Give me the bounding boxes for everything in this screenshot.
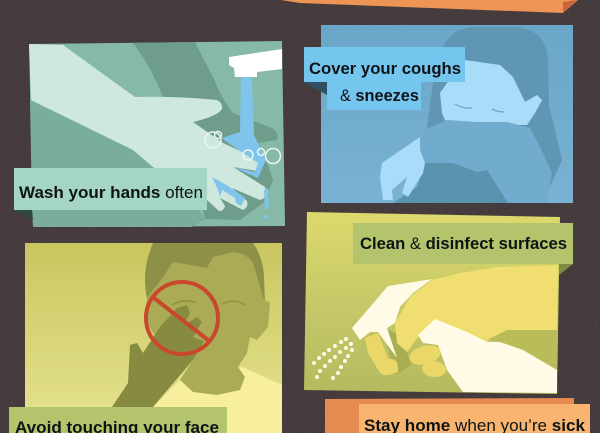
shoulder shadow: [393, 163, 508, 203]
label: clean and disinfect surfaces: [353, 223, 573, 264]
label: stay home when you're sick: [359, 404, 590, 433]
panel: clean and disinfect surfaces: [304, 212, 573, 394]
shirt: [140, 367, 282, 433]
face: [440, 60, 542, 125]
label: wash your hands often: Wash your hands often: [19, 183, 203, 202]
label shadow: [559, 264, 573, 275]
panel: wash your hands: [14, 41, 285, 227]
water drop: [264, 215, 268, 219]
hair: [145, 243, 265, 303]
label: wash your hands often: [14, 168, 207, 210]
background hand shadow: [133, 42, 278, 220]
label: clean and disinfect surfaces: Clean & disinfect surfaces: [360, 234, 567, 253]
head and neck: [144, 252, 270, 395]
water stream: [212, 77, 269, 210]
hand touching face: [112, 305, 204, 407]
panel: stay home when sick: [325, 398, 590, 433]
sleeve shading: [30, 100, 205, 227]
label: avoid touching your face: [9, 407, 227, 433]
spray head: [352, 279, 432, 358]
hand: [380, 137, 425, 200]
label: cover your coughs and sneezes: [304, 47, 465, 110]
gloved hand: [395, 265, 558, 352]
hair: [427, 27, 562, 203]
panel: avoid touching your face: [9, 243, 282, 433]
faucet: [229, 49, 282, 77]
prohibition sign: [146, 282, 218, 354]
bottle: [418, 319, 557, 393]
spray droplets: [312, 337, 354, 380]
label shadow: [14, 210, 33, 220]
soap bubbles: [205, 132, 280, 164]
closed eyes: [455, 104, 504, 112]
eyebrows: [172, 301, 246, 305]
fingers: [365, 333, 447, 378]
panel: orange card at top: [281, 0, 578, 13]
shaded sleeve: [487, 330, 557, 370]
shadow between fingers: [383, 328, 412, 375]
label: cover your coughs and sneezes: & sneezes: [340, 86, 419, 105]
panel: cover your coughs: [304, 25, 573, 203]
washing hand: [29, 44, 266, 211]
label: cover your coughs and sneezes: Cover your coughs: [309, 59, 461, 78]
arm covering mouth: [420, 120, 552, 203]
